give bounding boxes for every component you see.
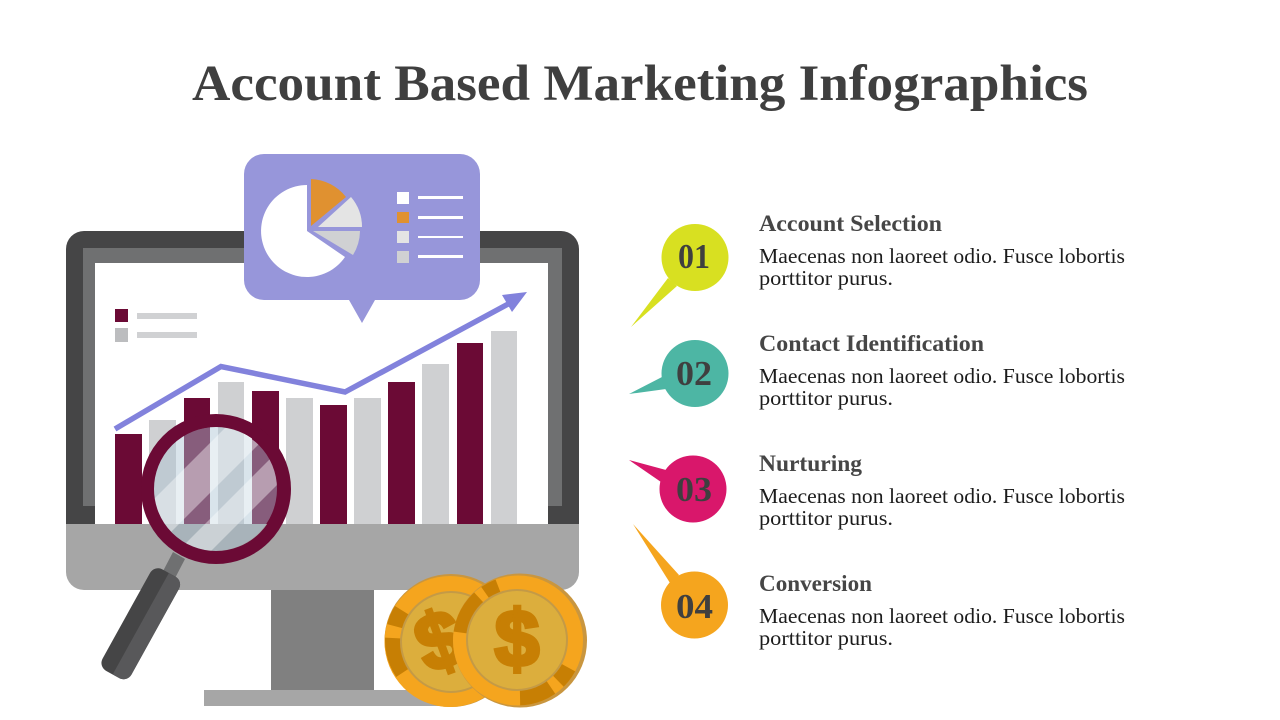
item 02 text: porttitor purus.	[759, 386, 893, 410]
chart legend	[115, 309, 197, 342]
callout badge 02: 02	[676, 354, 712, 393]
item 01 text: Maecenas non laoreet odio. Fusce lobortis	[759, 244, 1125, 268]
callout badge 03	[629, 456, 726, 522]
arrow: trend line	[115, 292, 527, 429]
title: Account Based Marketing Infographics	[192, 56, 1088, 112]
icon: front coin: $	[495, 594, 539, 683]
callout badge 02	[629, 340, 728, 407]
callout badge 04	[633, 524, 728, 638]
callout badge 04: 04	[676, 587, 713, 626]
speech bubble with pie chart	[244, 154, 480, 323]
item 01 text	[759, 211, 1125, 290]
bar chart	[115, 331, 517, 524]
item 02 text	[759, 331, 1125, 410]
monitor	[66, 231, 579, 706]
item 03 text: Maecenas non laoreet odio. Fusce lobortis	[759, 484, 1125, 508]
item 04 text	[759, 571, 1125, 650]
icon: back coin: $	[403, 591, 476, 690]
item 04 text: porttitor purus.	[759, 626, 893, 650]
item 02 text: Maecenas non laoreet odio. Fusce lobortis	[759, 364, 1125, 388]
item 04 text: Conversion	[759, 571, 872, 596]
item 04 text: Maecenas non laoreet odio. Fusce lobortis	[759, 604, 1125, 628]
item 02 text: Contact Identification	[759, 331, 984, 356]
item 03 text: Nurturing	[759, 451, 863, 476]
item 01 text: porttitor purus.	[759, 266, 893, 290]
callout badge 01: 01	[678, 237, 710, 276]
icon: magnifying glass	[101, 414, 291, 680]
icon: back coin	[384, 574, 485, 707]
callout badge 01	[631, 224, 728, 327]
icon: front coin	[453, 574, 587, 708]
pie chart	[261, 179, 362, 277]
item 03 text	[759, 451, 1125, 530]
pie legend	[397, 192, 463, 263]
item 03 text: porttitor purus.	[759, 506, 893, 530]
item 01 text: Account Selection	[759, 211, 942, 236]
callout badge 03: 03	[676, 470, 712, 509]
